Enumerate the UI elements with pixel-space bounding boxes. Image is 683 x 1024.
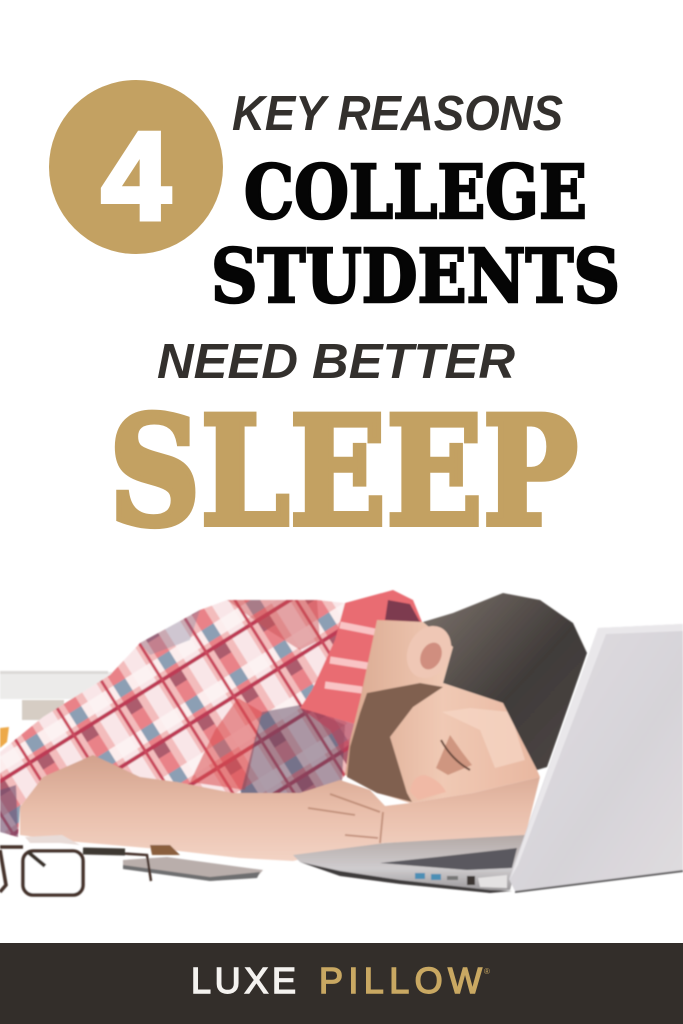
- heading line: NEED BETTER: NEED BETTER: [157, 335, 516, 389]
- laptop base and keyboard: [293, 835, 525, 893]
- neck and face: [345, 620, 540, 803]
- logo wordmark: PILLOW: PILLOW: [319, 960, 482, 1001]
- laptop screen lid: [509, 624, 683, 893]
- photo: student asleep on a laptop: [0, 590, 683, 895]
- brown object on desk: [150, 845, 180, 855]
- bracelet: [25, 835, 80, 845]
- heading line: STUDENTS: STUDENTS: [211, 234, 620, 320]
- heading line: SLEEP: SLEEP: [109, 384, 578, 560]
- forearm under head and hand: [20, 755, 540, 861]
- heading line: KEY REASONS: KEY REASONS: [232, 87, 563, 141]
- badge: number 4: [49, 80, 223, 254]
- phone: [123, 857, 263, 881]
- hair: [423, 593, 587, 770]
- badge: number 4: 4: [102, 108, 171, 246]
- shirt collar: [300, 590, 422, 752]
- heading line: COLLEGE: COLLEGE: [244, 150, 587, 236]
- beard: [347, 683, 443, 802]
- ear: [399, 619, 459, 685]
- background window sill: [0, 671, 112, 748]
- logo wordmark: LUXE: LUXE: [191, 960, 296, 1001]
- footer bar: brand: [0, 943, 683, 1024]
- plaid shirt: [0, 600, 377, 837]
- glasses: [0, 847, 151, 895]
- registered mark: ®: [484, 967, 490, 976]
